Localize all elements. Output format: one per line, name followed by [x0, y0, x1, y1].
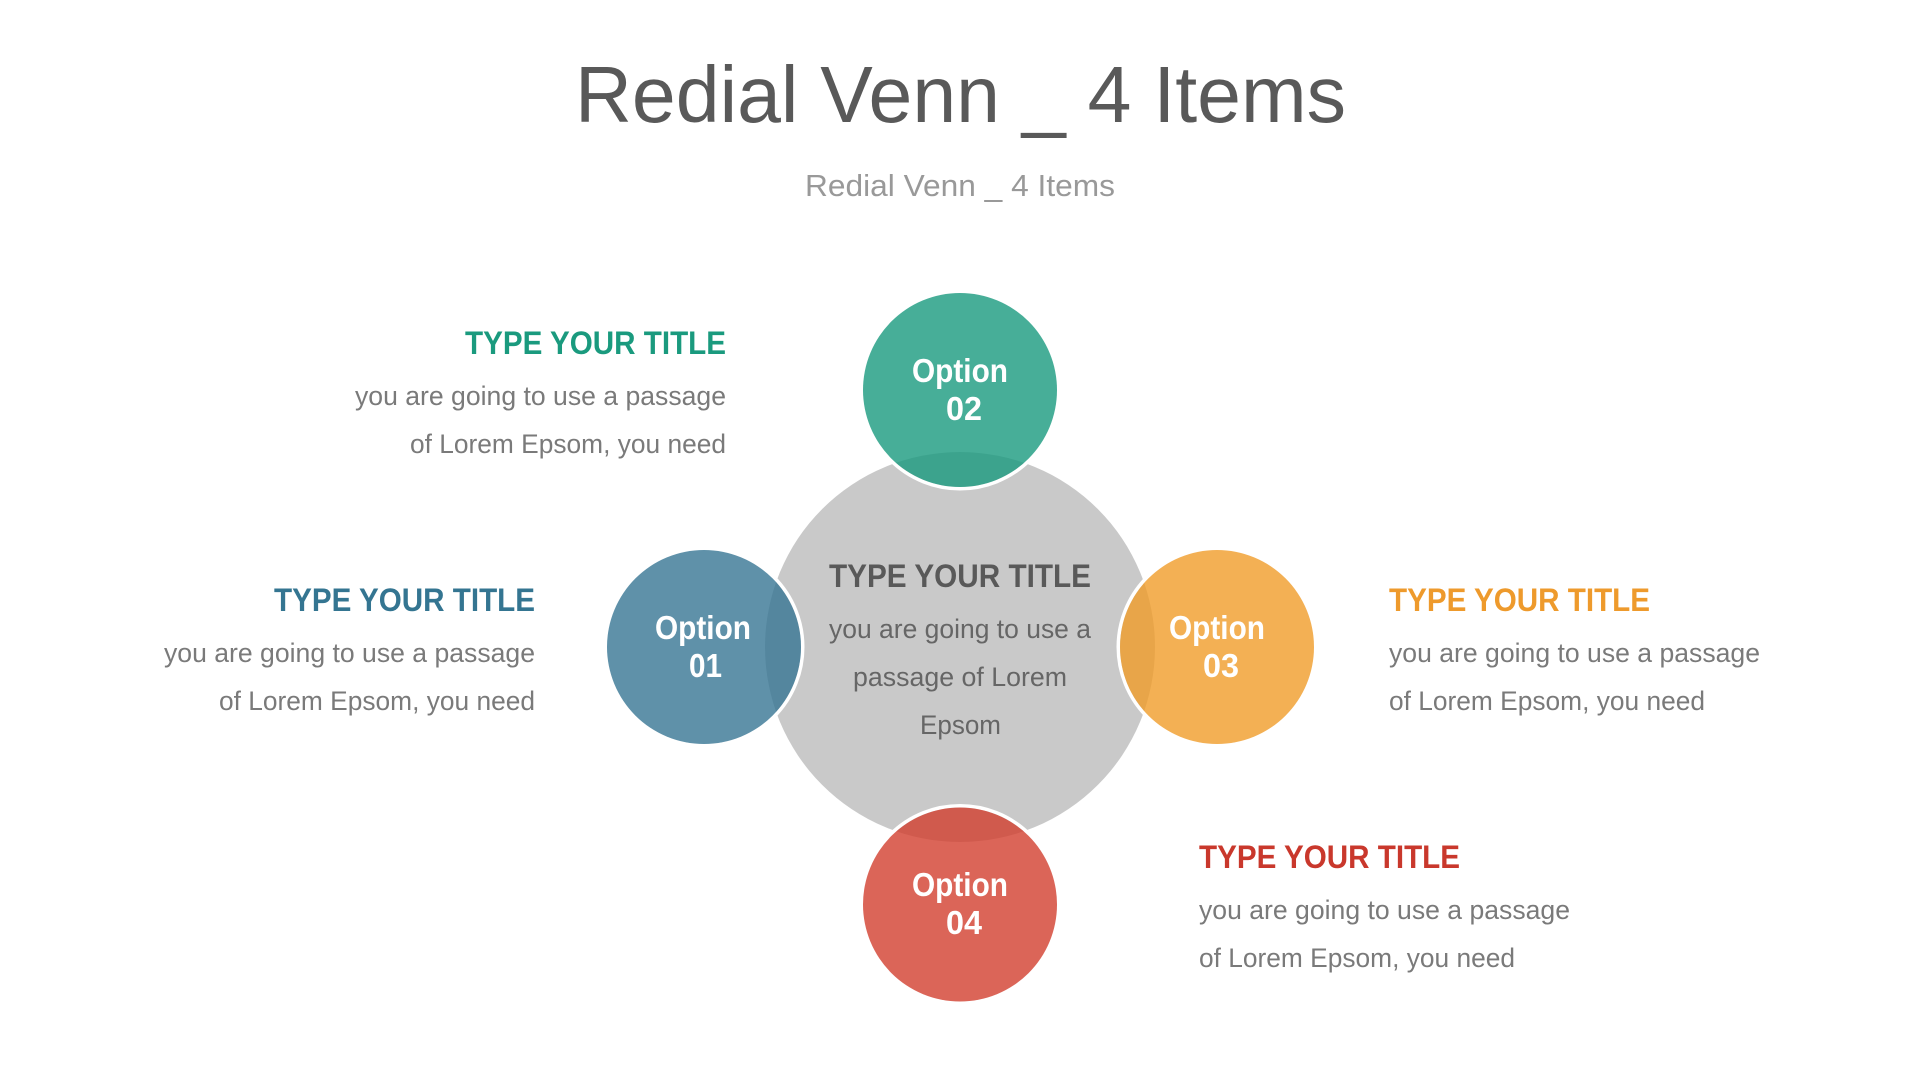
option 02 circle	[861, 291, 1059, 489]
text block: option 04: of Lorem Epsom, you need	[1199, 943, 1515, 973]
text block: option 03: you are going to use a passage	[1389, 638, 1760, 668]
text block: option 03	[1389, 582, 1760, 716]
option 02 circle: Option	[912, 352, 1008, 389]
option 03 circle: 03	[1203, 647, 1239, 684]
title: Redial Venn _ 4 Items	[575, 50, 1346, 139]
text block: option 02	[355, 325, 726, 459]
option 03 circle	[1118, 548, 1316, 746]
option 02 circle: 02	[946, 390, 982, 427]
option 01 circle: 01	[689, 647, 722, 684]
text block: option 01	[164, 582, 535, 716]
text block: option 02: you are going to use a passage	[355, 381, 726, 411]
option 04 circle: 04	[946, 904, 983, 941]
option 03 circle: Option	[1169, 609, 1265, 646]
option 01 circle: Option	[655, 609, 751, 646]
text block: option 04: you are going to use a passage	[1199, 895, 1570, 925]
central text block: Epsom	[920, 710, 1001, 740]
central circle	[765, 452, 1155, 842]
text block: option 04	[1199, 839, 1570, 973]
text block: option 01: you are going to use a passage	[164, 638, 535, 668]
option 04 circle	[861, 806, 1059, 1003]
text block: option 03: TYPE YOUR TITLE	[1389, 582, 1650, 618]
central text block	[829, 558, 1092, 740]
option 04 circle: Option	[912, 866, 1008, 903]
central text block: TYPE YOUR TITLE	[829, 558, 1091, 594]
subtitle: Redial Venn _ 4 Items	[805, 168, 1115, 203]
option 01 circle	[605, 548, 803, 746]
text block: option 04: TYPE YOUR TITLE	[1199, 839, 1460, 875]
text block: option 02: of Lorem Epsom, you need	[410, 429, 726, 459]
text block: option 01: TYPE YOUR TITLE	[274, 582, 535, 618]
text block: option 02: TYPE YOUR TITLE	[465, 325, 726, 361]
central text block: passage of Lorem	[853, 662, 1067, 692]
central text block: you are going to use a	[829, 614, 1092, 644]
text block: option 03: of Lorem Epsom, you need	[1389, 686, 1705, 716]
text block: option 01: of Lorem Epsom, you need	[219, 686, 535, 716]
